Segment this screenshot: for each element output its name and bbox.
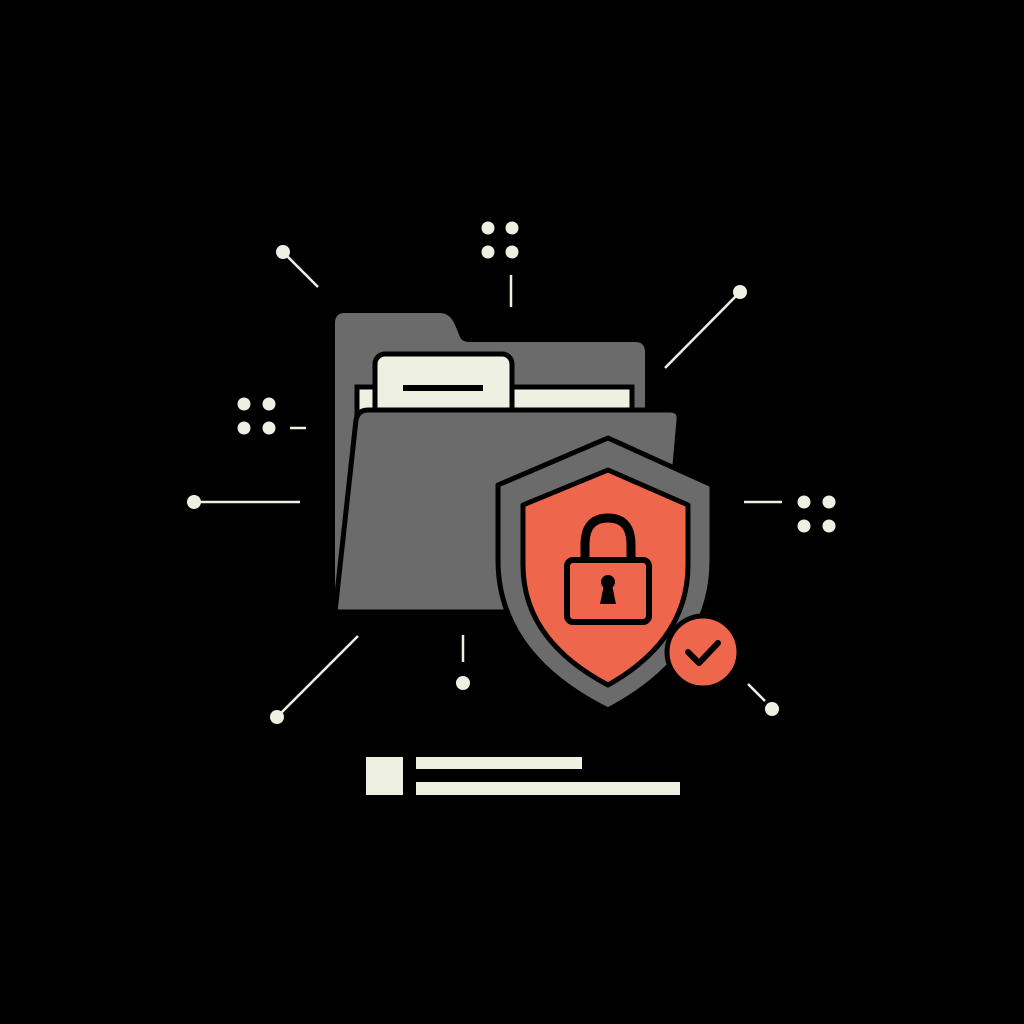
icon: lock bbox=[567, 518, 649, 622]
caption placeholder bars bbox=[366, 757, 680, 795]
folder back bbox=[335, 313, 645, 612]
icon: check badge bbox=[667, 616, 739, 688]
shield bbox=[498, 438, 712, 710]
decorations: dots and rays bbox=[187, 222, 836, 724]
folder front bbox=[335, 410, 679, 612]
documents bbox=[357, 354, 632, 427]
